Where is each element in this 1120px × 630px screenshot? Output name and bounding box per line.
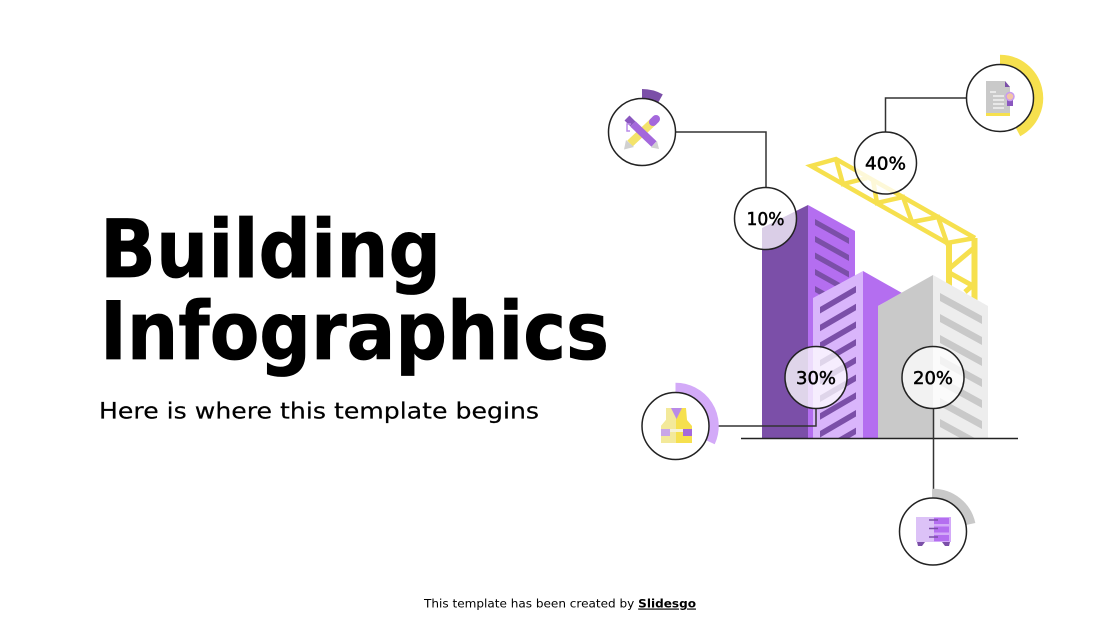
title: Infographics	[100, 285, 609, 378]
progress arc: document	[1000, 60, 1038, 132]
icon: pencil and pen	[624, 118, 659, 150]
subtitle: Here is where this template begins	[99, 398, 539, 424]
title	[100, 203, 609, 378]
progress arc: vest	[676, 388, 714, 442]
badge: 10%: 10%	[746, 209, 784, 230]
building: middle lilac	[813, 271, 902, 455]
crane	[811, 159, 975, 300]
ground line	[741, 438, 1018, 440]
icon circle: tools	[608, 98, 676, 166]
icon: certificate	[986, 81, 1014, 116]
icon: drawers	[916, 517, 951, 546]
badge: 20%	[902, 346, 964, 408]
icon circle: cabinet	[900, 498, 966, 565]
badge: 30%: 30%	[796, 368, 836, 389]
icon circle: document	[966, 64, 1034, 132]
icon circle: vest	[642, 392, 709, 460]
progress arc: cabinet	[933, 493, 971, 524]
badge: 20%: 20%	[913, 368, 953, 389]
connector lines	[676, 98, 966, 498]
progress arc: tools	[642, 94, 660, 98]
footer credit: This template has been created by Slidesgo	[423, 596, 696, 610]
badge: 40%: 40%	[865, 154, 906, 174]
badge: 30%	[785, 346, 847, 408]
badge: 40%	[854, 132, 916, 194]
title: Building	[100, 203, 441, 296]
badge: 10%	[734, 188, 796, 250]
icon: safety vest	[661, 408, 692, 443]
building: grey	[878, 275, 988, 450]
building: tall purple	[762, 205, 855, 438]
